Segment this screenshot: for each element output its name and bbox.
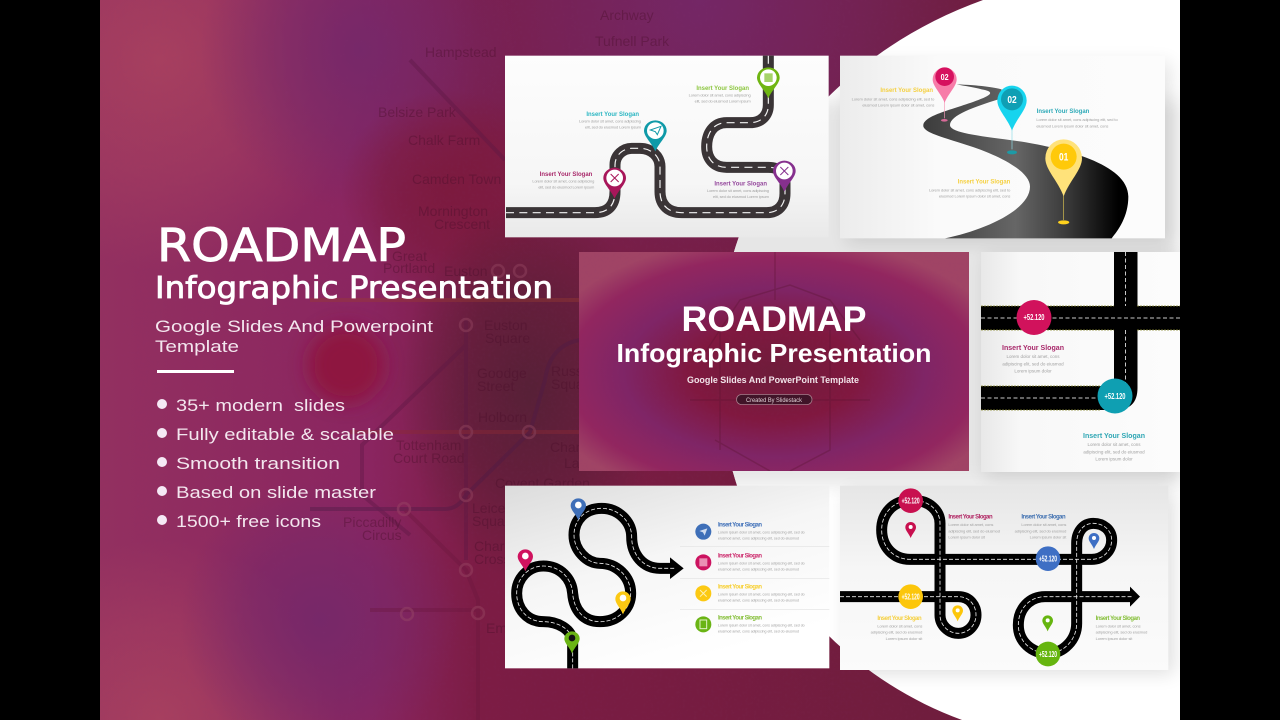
pin: magenta bbox=[603, 168, 626, 199]
subway station labels: Charing bbox=[474, 538, 523, 554]
subway station labels bbox=[343, 7, 670, 636]
subway station labels: Street bbox=[477, 378, 514, 394]
subway station labels: Cross bbox=[474, 551, 511, 567]
badge: yellow: +52.120 bbox=[902, 593, 920, 602]
list item: pink: Insert Your Slogan bbox=[718, 553, 762, 559]
label: green bbox=[689, 86, 751, 104]
label: blue: Insert Your Slogan bbox=[1021, 515, 1066, 521]
label: top yellow bbox=[852, 88, 935, 108]
pin: crimson bbox=[905, 522, 916, 538]
label: yellow: adipiscing elit, sed do eiusmod bbox=[871, 630, 922, 635]
feature bullet list: 1500+ free icons bbox=[176, 513, 321, 531]
list item: pink: Lorem ipsum dolor sit amet, cons adipiscing elit, sed do bbox=[718, 561, 805, 566]
pin: pink 02 bbox=[933, 67, 957, 122]
panel: S-curve road slide with list bbox=[505, 486, 829, 668]
label: green bbox=[1096, 616, 1147, 641]
list item: yellow bbox=[695, 584, 805, 602]
badge: green bbox=[1036, 642, 1060, 666]
label: blue: adipiscing elit, sed do eiusmod bbox=[1015, 528, 1066, 533]
cover map lines bbox=[690, 252, 870, 471]
cover title: ROADMAP bbox=[682, 300, 866, 339]
subway station labels: Lane bbox=[564, 455, 595, 471]
label: top yellow: eiusmod Lorem ipsum dolor sit amet, cons bbox=[862, 103, 934, 108]
label: purple: elit, sed do eiusmod Lorem ipsum bbox=[713, 194, 770, 199]
label: cyan bbox=[1036, 109, 1118, 128]
label: bottom yellow: Insert Your Slogan bbox=[958, 179, 1011, 185]
subway station labels: Euston bbox=[444, 263, 488, 279]
list dividers bbox=[680, 547, 829, 609]
subway station labels: Covent Garden bbox=[495, 475, 590, 491]
panel: intersecting roads slide bbox=[981, 252, 1180, 472]
label: pink: Insert Your Slogan bbox=[1002, 343, 1064, 352]
tagline: Template bbox=[155, 337, 239, 356]
tagline bbox=[155, 317, 433, 356]
cover tagline: Google Slides And PowerPoint Template bbox=[687, 375, 859, 386]
label: blue bbox=[1015, 515, 1067, 540]
label: purple bbox=[707, 181, 770, 199]
label: top yellow: Lorem dolor sit amet, cons adipiscing elit, sed to bbox=[852, 96, 935, 101]
subtitle: Infographic Presentation: Infographic Presentation bbox=[155, 271, 553, 306]
label: teal: elit, sed do eiusmod Lorem ipsum bbox=[585, 125, 642, 130]
label: pink: Lorem dolor sit amet, cons bbox=[1006, 354, 1060, 359]
list item: pink bbox=[695, 553, 805, 572]
label: blue: Lorem ipsum dolor sit bbox=[1030, 535, 1067, 540]
label: purple: Insert Your Slogan bbox=[714, 181, 767, 187]
label: teal bbox=[579, 112, 642, 130]
road bbox=[923, 84, 1128, 238]
subway station labels: Chalk Farm bbox=[408, 132, 480, 148]
label: green: Insert Your Slogan bbox=[696, 86, 749, 92]
list item: yellow: eiusmod amet, cons adipiscing elit, sed do eiusmod bbox=[718, 597, 799, 602]
subway station labels: Embankment bbox=[486, 620, 569, 636]
label: yellow bbox=[871, 616, 923, 641]
badge: pink: +52.120 bbox=[1024, 312, 1045, 322]
road bbox=[506, 56, 785, 213]
subway station labels: Goodge bbox=[477, 365, 527, 381]
subway station labels: Crescent bbox=[434, 216, 490, 232]
badge: teal: +52.120 bbox=[1104, 391, 1126, 401]
label: pink: Lorem ipsum dolor bbox=[1014, 368, 1052, 374]
subway station labels: Archway bbox=[600, 7, 654, 23]
white curved background shape bbox=[718, 0, 1180, 720]
pin: teal bbox=[644, 120, 667, 151]
title: ROADMAP: ROADMAP bbox=[157, 219, 406, 272]
subway station labels: Great bbox=[392, 248, 427, 264]
list item: blue bbox=[695, 522, 805, 540]
subway station labels: Holborn bbox=[478, 409, 527, 425]
cover credit pill: Created By Slidestack bbox=[746, 397, 803, 404]
label: cyan: Lorem dolor sit amet, cons adipiscing elit, sed to bbox=[1036, 117, 1118, 122]
label: bottom yellow: Lorem dolor sit amet, cons adipiscing elit, sed to bbox=[929, 188, 1011, 193]
label: top yellow: Insert Your Slogan bbox=[880, 88, 933, 94]
feature bullet list bbox=[157, 397, 394, 531]
pin: green bbox=[1042, 615, 1053, 631]
subway station labels: Square bbox=[485, 330, 530, 346]
label: green: Insert Your Slogan bbox=[1096, 616, 1140, 622]
list item: blue: Insert Your Slogan bbox=[718, 522, 762, 528]
subway station labels: Tufnell Park bbox=[595, 33, 670, 49]
pin: blue bbox=[1089, 533, 1099, 549]
label: teal: Lorem ipsum dolor bbox=[1095, 456, 1133, 462]
subway station labels: Tottenham bbox=[396, 437, 461, 453]
subway station labels: Chancery bbox=[550, 439, 610, 455]
badge: yellow bbox=[898, 584, 923, 609]
feature bullet list: 35+ modern slides bbox=[176, 397, 345, 415]
pin: blue bbox=[571, 498, 586, 520]
label: green: Lorem ipsum dolor sit bbox=[1096, 636, 1133, 641]
label: bottom yellow: eiusmod Lorem ipsum dolor sit amet, cons bbox=[939, 194, 1010, 199]
pin: pink bbox=[518, 549, 533, 571]
label: magenta bbox=[532, 172, 595, 190]
pin: yellow 01: 01 bbox=[1059, 152, 1068, 164]
label: magenta: Insert Your Slogan bbox=[540, 172, 593, 178]
cover subtitle: Infographic Presentation bbox=[616, 338, 932, 368]
list item: blue: Lorem ipsum dolor sit amet, cons adipiscing elit, sed do bbox=[718, 530, 805, 535]
tagline: Google Slides And Powerpoint bbox=[155, 317, 433, 336]
label: teal: Insert Your Slogan bbox=[586, 112, 639, 118]
panel: cover slide bbox=[579, 252, 969, 471]
subway station labels: Circus bbox=[362, 527, 402, 543]
pin: cyan 02 bbox=[997, 86, 1027, 154]
label: yellow: Lorem ipsum dolor sit bbox=[886, 636, 923, 641]
label: teal: Lorem dolor sit amet, cons adipiscing bbox=[579, 119, 641, 124]
badge: green: +52.120 bbox=[1039, 650, 1057, 659]
label: yellow: Insert Your Slogan bbox=[877, 616, 922, 622]
pin: cyan 02: 02 bbox=[1007, 95, 1017, 106]
label: teal: Lorem dolor sit amet, cons bbox=[1087, 442, 1141, 447]
subway station labels: Square bbox=[472, 513, 517, 529]
subway station labels: Russell bbox=[551, 363, 597, 379]
label: blue: Lorem dolor sit amet, cons bbox=[1021, 522, 1066, 527]
subway station labels: Hampstead bbox=[425, 44, 497, 60]
list item: green: Insert Your Slogan bbox=[718, 615, 762, 621]
badge: crimson: +52.120 bbox=[902, 497, 920, 506]
feature bullet list: Smooth transition bbox=[176, 455, 340, 473]
label: yellow: Lorem dolor sit amet, cons bbox=[877, 624, 922, 629]
subway station labels: Camden Town bbox=[412, 171, 501, 187]
road with arrow bbox=[517, 508, 684, 668]
badge: blue bbox=[1036, 546, 1060, 571]
title block bbox=[155, 219, 553, 356]
subway station labels: Belsize Park bbox=[378, 104, 457, 120]
panel: looping roads slide bbox=[840, 486, 1168, 670]
pin: green bbox=[757, 67, 780, 98]
subway station labels: Portland bbox=[383, 260, 435, 276]
pin: pink 02: 02 bbox=[941, 72, 949, 82]
label: crimson bbox=[948, 515, 1000, 540]
label: teal: adipiscing elit, sed do eiusmod bbox=[1083, 450, 1145, 454]
list item: blue: eiusmod amet, cons adipiscing elit, sed do eiusmod bbox=[718, 535, 799, 540]
label: green: Lorem dolor sit amet, cons bbox=[1096, 624, 1141, 629]
badge: pink bbox=[1016, 300, 1052, 335]
badge: crimson bbox=[898, 488, 923, 513]
label: magenta: elit, sed do eiusmod Lorem ipsum bbox=[538, 185, 595, 190]
subway map backdrop bbox=[310, 59, 579, 621]
label: crimson: adipiscing elit, sed do eiusmod bbox=[948, 528, 1000, 533]
subway station labels: Leicester bbox=[472, 500, 529, 516]
badge: teal bbox=[1098, 378, 1132, 414]
label: teal: Insert Your Slogan bbox=[1083, 431, 1145, 440]
label: cyan: eiusmod Lorem ipsum dolor sit amet, cons bbox=[1036, 123, 1108, 128]
cover credit pill bbox=[736, 394, 812, 404]
label: green: elit, sed do eiusmod Lorem ipsum bbox=[695, 99, 751, 104]
label: crimson: Lorem dolor sit amet, cons bbox=[948, 522, 993, 527]
looping road bbox=[840, 501, 1140, 653]
grey soft shadows behind slides bbox=[700, 62, 1180, 674]
crossing roads bbox=[981, 252, 1180, 410]
list item: pink: eiusmod amet, cons adipiscing elit, sed do eiusmod bbox=[718, 567, 799, 572]
label: crimson: Lorem ipsum dolor sit bbox=[948, 535, 986, 540]
subway station labels: Euston bbox=[484, 317, 528, 333]
label: bottom yellow bbox=[929, 179, 1011, 199]
label: magenta: Lorem dolor sit amet, cons adipiscing bbox=[532, 179, 594, 184]
subway station labels: Piccadilly bbox=[343, 514, 401, 530]
pin: yellow bbox=[615, 591, 631, 614]
subway station labels: Square bbox=[551, 376, 596, 392]
label: crimson: Insert Your Slogan bbox=[948, 515, 993, 521]
list item: green: Lorem ipsum dolor sit amet, cons adipiscing elit, sed do bbox=[718, 623, 805, 628]
label: green: Lorem dolor sit amet, cons adipiscing bbox=[689, 92, 751, 97]
label: purple: Lorem dolor sit amet, cons adipiscing bbox=[707, 188, 769, 193]
list item: yellow: Lorem ipsum dolor sit amet, cons adipiscing elit, sed do bbox=[718, 592, 805, 597]
subway station labels: Mornington bbox=[418, 203, 488, 219]
badge: blue: +52.120 bbox=[1039, 555, 1057, 564]
label: cyan: Insert Your Slogan bbox=[1037, 109, 1090, 115]
label: teal bbox=[1083, 431, 1145, 462]
divider rule bbox=[157, 370, 234, 373]
panel: perspective road slide bbox=[840, 56, 1165, 238]
pin: yellow 01 bbox=[1045, 139, 1082, 224]
panel: winding road slide bbox=[505, 56, 829, 237]
list item: green: eiusmod amet, cons adipiscing elit, sed do eiusmod bbox=[718, 628, 799, 633]
label: green: adipiscing elit, sed do eiusmod bbox=[1096, 630, 1147, 635]
pin: purple bbox=[773, 161, 796, 192]
list item: green bbox=[695, 615, 805, 633]
pin: yellow bbox=[952, 605, 963, 621]
label: pink bbox=[1002, 343, 1064, 374]
feature bullet list: Fully editable & scalable bbox=[176, 426, 394, 444]
list item: yellow: Insert Your Slogan bbox=[718, 584, 762, 590]
label: pink: adipiscing elit, sed do eiusmod bbox=[1002, 362, 1064, 366]
subway station labels: Court Road bbox=[393, 450, 465, 466]
feature bullet list: Based on slide master bbox=[176, 484, 377, 502]
pin: green bbox=[564, 631, 580, 653]
